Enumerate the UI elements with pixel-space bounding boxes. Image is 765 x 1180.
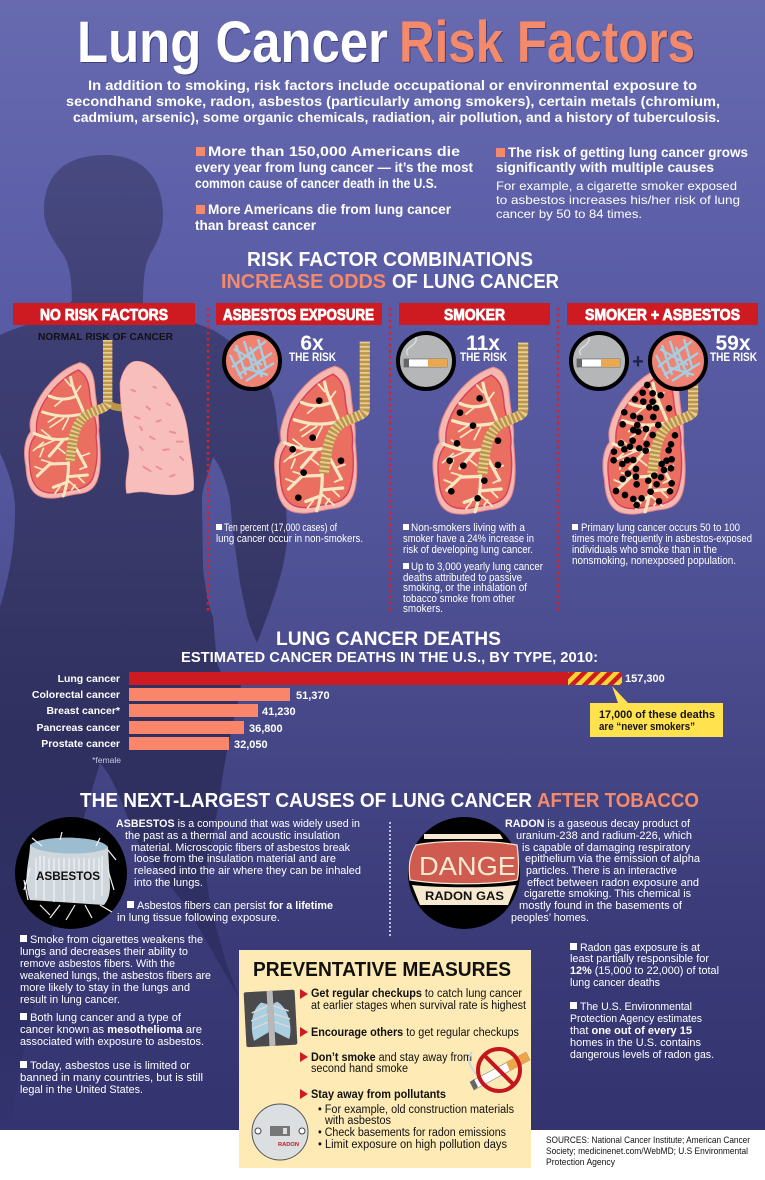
panel: preventative measures: at earlier stages when survival rate is highest — [311, 1000, 527, 1012]
panel: smoker + asbestos: + — [632, 351, 644, 373]
panel: smoker: smokers. — [403, 603, 443, 615]
panel: smoker + asbestos: 59x — [715, 332, 751, 355]
silhouette of person — [0, 155, 287, 1130]
panel: asbestos exposure: lung cancer occur in non-smokers. — [216, 533, 363, 545]
center dotted divider — [389, 822, 391, 938]
radon text: uranium-238 and radium-226, which — [516, 830, 692, 842]
radon text — [505, 818, 701, 924]
icon: radon detector — [252, 1104, 308, 1160]
panel: preventative measures: • Check basements for radon emissions — [318, 1127, 506, 1139]
asbestos text: into the lungs. — [134, 877, 203, 889]
combinations heading: OF LUNG CANCER — [392, 271, 560, 293]
radon text: effect between radon exposure and — [527, 877, 699, 889]
bar chart: 41,230 — [262, 706, 296, 718]
key facts right — [496, 145, 748, 221]
next-largest causes heading: THE NEXT-LARGEST CAUSES OF LUNG CANCER — [80, 790, 533, 812]
white footer — [0, 1130, 765, 1180]
panel: smoker: Non-smokers living with a — [411, 522, 525, 534]
sources: Society; medicinenet.com/WebMD; U.S Environmental — [546, 1146, 748, 1156]
radon facts column: Protection Agency estimates — [570, 1013, 702, 1025]
panel: smoker + asbestos: nonsmoking, nonexposed population. — [572, 555, 736, 567]
radon facts column: homes in the U.S. contains — [570, 1037, 701, 1049]
combinations heading — [221, 249, 560, 293]
panel: preventative measures: Don’t smoke and stay away from — [311, 1052, 472, 1064]
radon facts column: Radon gas exposure is at — [580, 942, 701, 954]
bar chart: 36,800 — [249, 723, 283, 735]
key facts left: common cause of cancer death in the U.S. — [195, 176, 437, 191]
panel: smoker: smoker have a 24% increase in — [403, 533, 534, 545]
asbestos icon — [15, 817, 127, 929]
panel: preventative measures: Get regular checkups to catch lung cancer — [311, 988, 522, 1000]
deaths heading: ESTIMATED CANCER DEATHS IN THE U.S., BY TYPE, 2010: — [181, 650, 598, 666]
asbestos facts column: Today, asbestos use is limited or — [30, 1060, 190, 1072]
panel: asbestos exposure: THE RISK — [289, 352, 337, 364]
bar chart: Lung cancer — [58, 673, 120, 685]
asbestos icon: ASBESTOS — [36, 869, 100, 883]
panel: preventative measures: • Limit exposure on high pollution days — [318, 1139, 507, 1151]
sources — [546, 1135, 750, 1167]
intro text: cadmium, arsenic), some organic chemicals, radiation, air pollution, and a history of tuberculosis. — [73, 109, 720, 125]
key facts right: to asbestos increases his/her risk of lung — [496, 193, 740, 207]
combinations heading: INCREASE ODDS — [221, 271, 386, 293]
radon text: RADON is a gaseous decay product of — [505, 818, 691, 830]
radon facts column — [570, 942, 719, 1061]
combinations heading: RISK FACTOR COMBINATIONS — [247, 249, 533, 271]
radon text: mostly found in the basements of — [519, 900, 683, 912]
panel: no risk factors: NO RISK FACTORS — [40, 307, 168, 324]
asbestos facts column: banned in many countries, but is still — [20, 1072, 203, 1084]
icon: no smoking — [469, 1049, 530, 1091]
icon: x-ray — [244, 990, 297, 1047]
asbestos text: the past as a thermal and acoustic insulation — [125, 830, 340, 842]
panel: asbestos exposure: Ten percent (17,000 cases) of — [224, 522, 338, 534]
panel: preventative measures: Encourage others to get regular checkups — [311, 1027, 519, 1039]
bar chart: Colorectal cancer — [32, 689, 120, 701]
title: Risk Factors — [399, 10, 695, 75]
radon text: particles. There is an interactive — [526, 865, 677, 877]
radon icon: RADON GAS — [425, 889, 504, 903]
key facts left: than breast cancer — [195, 218, 317, 233]
asbestos facts column: weakened lungs, the asbestos fibers are — [19, 970, 211, 982]
bar chart: Breast cancer* — [46, 705, 121, 717]
panel: asbestos exposure: ASBESTOS EXPOSURE — [223, 307, 374, 324]
radon facts column: that one out of every 15 — [570, 1025, 692, 1037]
panel: preventative measures: Stay away from pollutants — [311, 1089, 446, 1101]
radon icon — [408, 817, 520, 929]
panel: smoker + asbestos: individuals who smoke than in the — [572, 544, 717, 556]
asbestos text: in lung tissue following exposure. — [117, 912, 280, 924]
panel: smoker + asbestos: Primary lung cancer occurs 50 to 100 — [581, 522, 740, 534]
radon facts column: lung cancer deaths — [570, 977, 660, 989]
radon text: cigarette smoking. This chemical is — [524, 888, 691, 900]
bar chart: 32,050 — [234, 739, 268, 751]
panel dividers — [208, 308, 558, 612]
radon icon: DANGE — [419, 851, 516, 881]
asbestos facts column — [19, 934, 211, 1096]
panel: no risk factors — [13, 303, 195, 498]
key facts left — [195, 144, 473, 233]
panel: smoker: smoking, or the inhalation of — [403, 582, 528, 594]
panel: preventative measures: with asbestos — [324, 1115, 391, 1127]
title: Lung Cancer — [77, 10, 388, 75]
panel: smoker: THE RISK — [460, 352, 508, 364]
panel: smoker + asbestos — [567, 303, 758, 567]
bar chart: 51,370 — [296, 690, 330, 702]
panel: asbestos exposure — [216, 303, 382, 545]
callout: never smokers: 17,000 of these deaths — [599, 709, 715, 721]
intro text: secondhand smoke, radon, asbestos (particularly among smokers), certain metals (chromium, — [66, 93, 720, 109]
radon text: is capable of damaging respiratory — [522, 842, 690, 854]
asbestos facts column: Both lung cancer and a type of — [30, 1012, 182, 1024]
intro text — [66, 77, 720, 125]
asbestos text: Asbestos fibers can persist for a lifetime — [137, 900, 333, 912]
asbestos facts column: legal in the United States. — [20, 1084, 143, 1096]
radon facts column: The U.S. Environmental — [580, 1001, 692, 1013]
next-largest causes heading: AFTER TOBACCO — [537, 790, 699, 812]
asbestos facts column: Smoke from cigarettes weakens the — [30, 934, 203, 946]
panel: preventative measures: • For example, old construction materials — [318, 1104, 514, 1116]
radon facts column: least partially responsible for — [570, 953, 709, 965]
radon text: epithelium via the emission of alpha — [525, 853, 701, 865]
panel: smoker + asbestos: SMOKER + ASBESTOS — [585, 307, 740, 324]
bar chart: 157,300 — [625, 673, 665, 685]
panel: preventative measures: second hand smoke — [311, 1063, 408, 1075]
intro text: In addition to smoking, risk factors include occupational or environmental exposure to — [88, 77, 697, 93]
key facts left: More than 150,000 Americans die — [208, 144, 461, 159]
key facts left: every year from lung cancer — it’s the most — [195, 160, 473, 175]
asbestos text: material. Microscopic fibers of asbestos break — [131, 842, 350, 854]
panel: smoker + asbestos: THE RISK — [710, 352, 758, 364]
panel: smoker: Up to 3,000 yearly lung cancer — [411, 561, 543, 573]
panel: preventative measures — [239, 950, 531, 1168]
asbestos facts column: cancer known as mesothelioma are — [20, 1024, 202, 1036]
key facts right: The risk of getting lung cancer grows — [508, 145, 748, 160]
asbestos text: loose from the insulation material and are — [134, 853, 336, 865]
deaths heading — [181, 629, 598, 666]
asbestos text: ASBESTOS is a compound that was widely used in — [116, 818, 360, 830]
asbestos facts column: lungs and decreases their ability to — [20, 946, 188, 958]
bar chart: *female — [92, 755, 121, 765]
radon facts column: dangerous levels of radon gas. — [570, 1049, 714, 1061]
key facts right: cancer by 50 to 84 times. — [496, 207, 642, 221]
icon: radon detector: RADON — [278, 1142, 299, 1148]
callout: never smokers: are “never smokers” — [599, 721, 695, 733]
title — [77, 10, 695, 75]
asbestos text — [116, 818, 361, 924]
panel: smoker: tobacco smoke from other — [403, 593, 515, 605]
panel: asbestos exposure: 6x — [300, 332, 324, 355]
deaths heading: LUNG CANCER DEATHS — [276, 629, 501, 650]
asbestos facts column: more likely to stay in the lungs and — [20, 982, 190, 994]
asbestos facts column: result in lung cancer. — [20, 994, 120, 1006]
asbestos text: released into the air where they can be inhaled — [134, 865, 361, 877]
key facts right: For example, a cigarette smoker exposed — [496, 179, 737, 193]
bar chart: Prostate cancer — [41, 738, 120, 750]
key facts right: significantly with multiple causes — [496, 160, 714, 175]
heading: preventative measures: PREVENTATIVE MEASURES — [253, 959, 511, 981]
radon facts column: 12% (15,000 to 22,000) of total — [570, 965, 719, 977]
panel: smoker — [398, 303, 550, 615]
asbestos facts column: remove asbestos fibers. With the — [20, 958, 175, 970]
panel: smoker: SMOKER — [444, 307, 505, 324]
panel: smoker: deaths attributed to passive — [403, 572, 522, 584]
sources: Protection Agency — [546, 1157, 615, 1167]
panel: smoker: risk of developing lung cancer. — [403, 544, 533, 556]
panel: smoker: 11x — [466, 332, 500, 355]
panel: no risk factors: NORMAL RISK OF CANCER — [38, 332, 174, 343]
bar chart — [32, 672, 665, 765]
key facts left: More Americans die from lung cancer — [208, 202, 452, 217]
radon text: peoples’ homes. — [511, 912, 589, 924]
bar chart: Pancreas cancer — [37, 722, 120, 734]
callout: never smokers — [590, 686, 723, 737]
asbestos facts column: associated with exposure to asbestos. — [20, 1036, 204, 1048]
